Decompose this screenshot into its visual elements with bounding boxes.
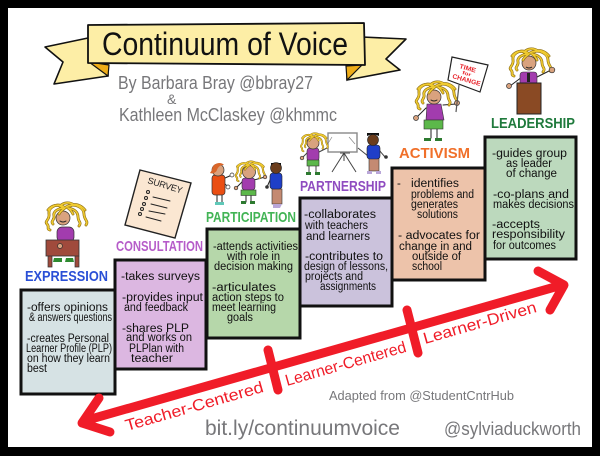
expression text: & answers questions xyxy=(29,312,112,324)
link: bit.ly: bit.ly/continuumvoice xyxy=(205,417,400,440)
icon: people at whiteboard xyxy=(300,133,388,175)
partnership text: projects and xyxy=(305,271,363,283)
heading: leadership: LEADERSHIP xyxy=(491,115,575,132)
participation text: -attends activities xyxy=(213,241,298,253)
heading: partnership: PARTNERSHIP xyxy=(300,178,386,195)
credit: sylvia duckworth: @sylviaduckworth xyxy=(444,419,581,439)
partnership text: and learners xyxy=(306,231,370,243)
activism text: change in and xyxy=(399,241,472,253)
leadership text: for outcomes xyxy=(493,240,556,252)
consultation text: and works on xyxy=(126,332,192,344)
leadership text: -accepts xyxy=(492,219,540,231)
partnership text xyxy=(304,209,388,293)
consultation text xyxy=(121,271,204,365)
expression text: -creates Personal xyxy=(27,333,109,345)
authors: Kathleen McClaskey @khmmc xyxy=(119,105,337,125)
activism text: solutions xyxy=(417,209,458,221)
authors: By Barbara Bray @bbray27 xyxy=(118,73,313,93)
icon: leader at podium xyxy=(506,49,555,114)
icon: activist with sign xyxy=(414,57,488,141)
icon: survey sheet xyxy=(125,170,191,238)
panel: consultation xyxy=(115,260,206,369)
expression text xyxy=(26,302,112,375)
activism text: - advocates for xyxy=(398,230,480,242)
consultation text: -provides input xyxy=(122,292,204,304)
sign text: for xyxy=(461,70,472,78)
arrow: teacher-centered to learner-driven xyxy=(82,271,564,432)
participation text: action steps to xyxy=(212,292,284,304)
leadership text xyxy=(492,148,574,252)
partnership text: design of lessons, xyxy=(304,261,388,273)
expression text: on how they learn xyxy=(27,353,110,365)
expression text: Learner Profile (PLP) xyxy=(26,343,112,355)
icon: student at desk xyxy=(46,203,87,267)
participation text: meet learning xyxy=(212,302,276,314)
leadership text: -guides group xyxy=(492,148,567,160)
authors: & xyxy=(167,91,177,107)
consultation text: and feedback xyxy=(124,302,188,314)
leadership text: as leader xyxy=(506,158,552,170)
sign text xyxy=(451,63,482,88)
panel: expression xyxy=(21,290,115,394)
expression text: -offers opinions xyxy=(27,302,108,314)
arrow label: learner-driven: Learner-Driven xyxy=(421,299,539,348)
consultation text: -shares PLP xyxy=(122,323,189,335)
partnership text: -contributes to xyxy=(305,251,383,263)
leadership text: of change xyxy=(506,168,557,180)
partnership text: with teachers xyxy=(304,220,368,232)
participation text: -articulates xyxy=(212,282,276,294)
title text: Continuum of Voice xyxy=(102,26,348,62)
panel: activism xyxy=(392,168,485,280)
panel: leadership xyxy=(485,137,576,259)
activism text: school xyxy=(412,261,442,273)
heading: activism: ACTIVISM xyxy=(399,145,470,162)
partnership text: -collaborates xyxy=(304,209,376,221)
icon: three people talking xyxy=(210,162,282,208)
activism text: outside of xyxy=(412,251,462,263)
consultation text: -takes surveys xyxy=(121,271,200,283)
icon: survey sheet: SURVEY xyxy=(146,175,184,195)
arrow label: teacher-centered: Teacher-Centered xyxy=(123,379,266,435)
participation text xyxy=(212,241,298,324)
expression text: best xyxy=(27,363,48,375)
activism text: problems and xyxy=(411,189,474,201)
title banner xyxy=(45,23,406,84)
participation text: decision making xyxy=(214,261,293,273)
participation text: with role in xyxy=(226,251,280,263)
leadership text: -co-plans and xyxy=(493,189,569,201)
participation text: goals xyxy=(227,312,253,324)
leadership text: responsibility xyxy=(492,229,565,241)
activism text: identifies xyxy=(411,178,459,190)
arrow label: learner-centered: Learner-Centered xyxy=(283,339,408,390)
credit: adapted from: Adapted from @StudentCntrHub xyxy=(329,388,514,403)
activism text: - xyxy=(397,178,401,190)
activism text xyxy=(397,178,480,273)
heading: expression: EXPRESSION xyxy=(25,268,108,285)
sign text: CHANGE xyxy=(451,73,482,88)
heading: consultation: CONSULTATION xyxy=(116,238,203,255)
heading: participation: PARTICIPATION xyxy=(206,209,296,226)
sign text: TIME xyxy=(458,63,477,75)
activism text: generates xyxy=(411,199,458,211)
panel: partnership xyxy=(300,198,392,306)
authors xyxy=(118,73,337,125)
leadership text: makes decisions xyxy=(493,199,574,211)
consultation text: PLPlan with xyxy=(129,343,184,355)
consultation text: teacher xyxy=(131,353,173,365)
panel: participation xyxy=(207,229,300,338)
partnership text: assignments xyxy=(320,281,376,293)
